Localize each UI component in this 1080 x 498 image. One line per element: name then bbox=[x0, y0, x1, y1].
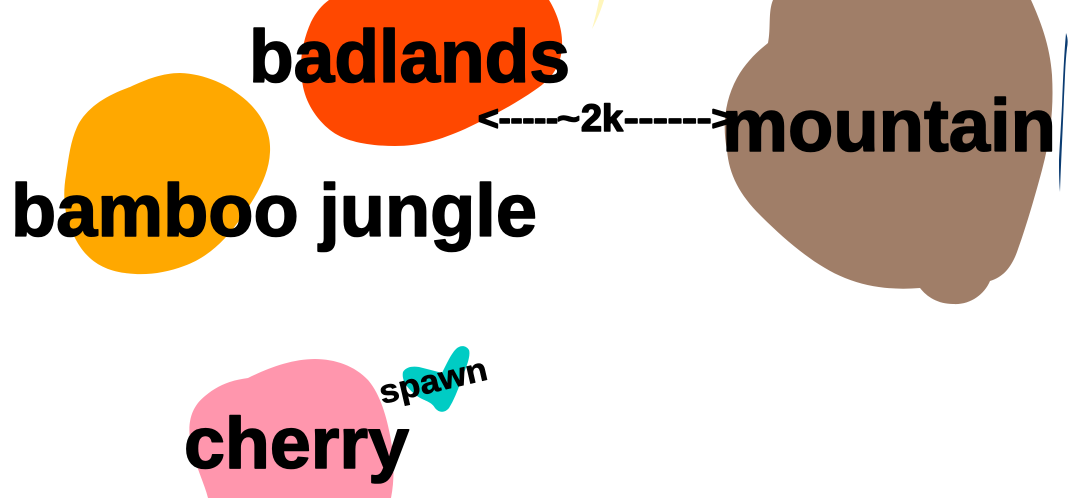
label: distance arrow: ------> bbox=[624, 100, 737, 138]
blob: bamboo jungle bbox=[64, 73, 270, 274]
blob: mountain bbox=[725, 0, 1053, 304]
label: distance arrow: 2k bbox=[581, 98, 624, 140]
label: distance arrow: <----- bbox=[478, 100, 558, 138]
label: badlands: badlands bbox=[249, 15, 570, 98]
blob: spawn bbox=[403, 346, 469, 412]
sliver: ocean biome edge bbox=[1059, 33, 1068, 192]
label: distance arrow bbox=[478, 98, 737, 140]
blob: badlands bbox=[301, 0, 562, 146]
label: spawn: spawn bbox=[375, 350, 491, 411]
label: mountain: mountain bbox=[722, 84, 1056, 167]
label: distance arrow: ~ bbox=[557, 100, 580, 138]
sliver: yellow biome edge bbox=[592, 0, 604, 29]
blob: cherry bbox=[189, 359, 394, 498]
label: cherry: cherry bbox=[184, 404, 409, 484]
label: bamboo jungle: bamboo jungle bbox=[11, 169, 537, 252]
